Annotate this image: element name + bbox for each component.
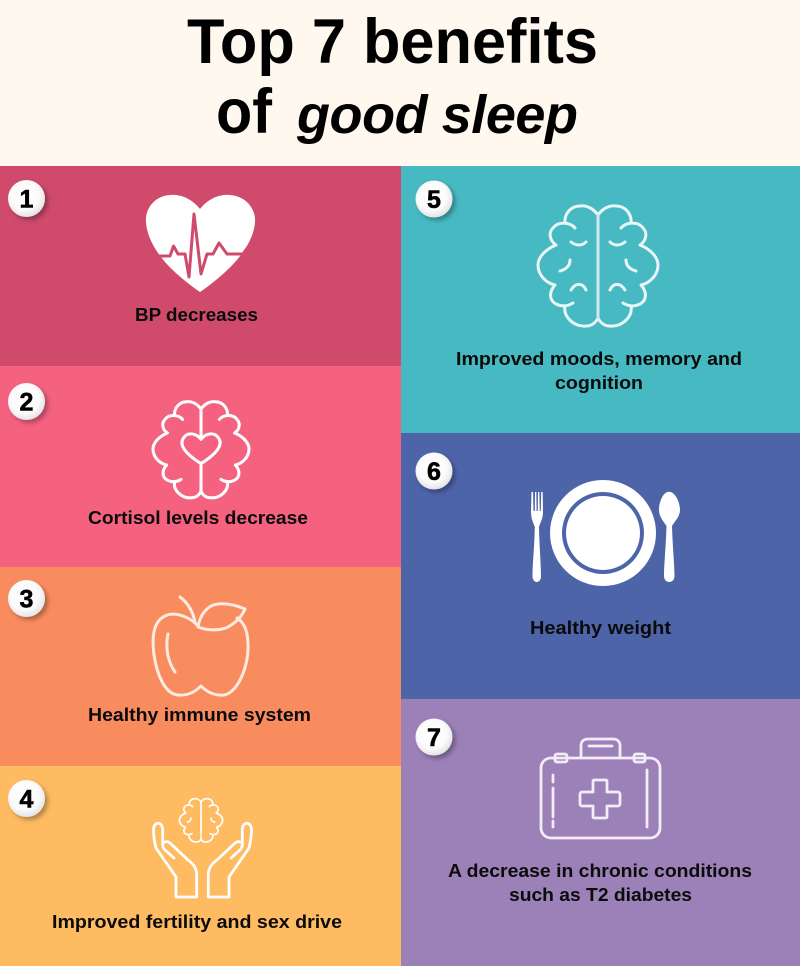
icon: apple [153, 597, 248, 695]
badge 1: 1 [20, 186, 34, 214]
icon: heart with pulse [146, 195, 255, 292]
label: Healthy immune system [88, 705, 311, 725]
badge 2: 2 [20, 388, 33, 416]
badge 6: 6 [427, 458, 441, 486]
panel 3: Healthy immune system [0, 567, 401, 766]
label [456, 349, 742, 393]
label: BP decreases [135, 305, 258, 325]
panel 6: Healthy weight [401, 433, 800, 699]
panel 4: Improved fertility and sex drive [0, 766, 401, 966]
badge 3 [8, 580, 45, 617]
label: Improved fertility and sex drive [52, 912, 342, 932]
panel 2: Cortisol levels decrease [0, 366, 401, 567]
badge 1 [8, 180, 45, 217]
label: such as T2 diabetes [509, 885, 692, 905]
panel 5: Improved moods, memory and cognition [401, 166, 800, 433]
title [0, 0, 800, 166]
badge 2 [8, 383, 45, 420]
badge 6 [416, 452, 452, 490]
badge 4: 4 [20, 786, 34, 814]
badge 4 [8, 780, 45, 817]
badge 7: 7 [427, 724, 441, 752]
icon: brain with heart [153, 402, 249, 498]
badge 5: 5 [427, 186, 441, 214]
badge 5 [416, 180, 452, 218]
icon: hands holding brain [154, 799, 252, 897]
label: Healthy weight [530, 618, 671, 638]
title: of [216, 77, 273, 147]
badge 7 [416, 718, 452, 756]
label: Cortisol levels decrease [88, 508, 308, 528]
icon: plate and cutlery [531, 480, 680, 586]
icon: first aid kit [541, 739, 660, 838]
badge 3: 3 [20, 586, 33, 614]
label [448, 861, 752, 905]
label: cognition [555, 373, 643, 393]
label: A decrease in chronic conditions [448, 861, 752, 881]
title: good sleep [296, 85, 578, 145]
panel 7: A decrease in chronic conditions [401, 699, 800, 966]
label: Improved moods, memory and [456, 349, 742, 369]
icon: brain [538, 206, 658, 326]
title: Top 7 benefits [187, 7, 598, 77]
panel 1: BP decreases [0, 166, 401, 366]
